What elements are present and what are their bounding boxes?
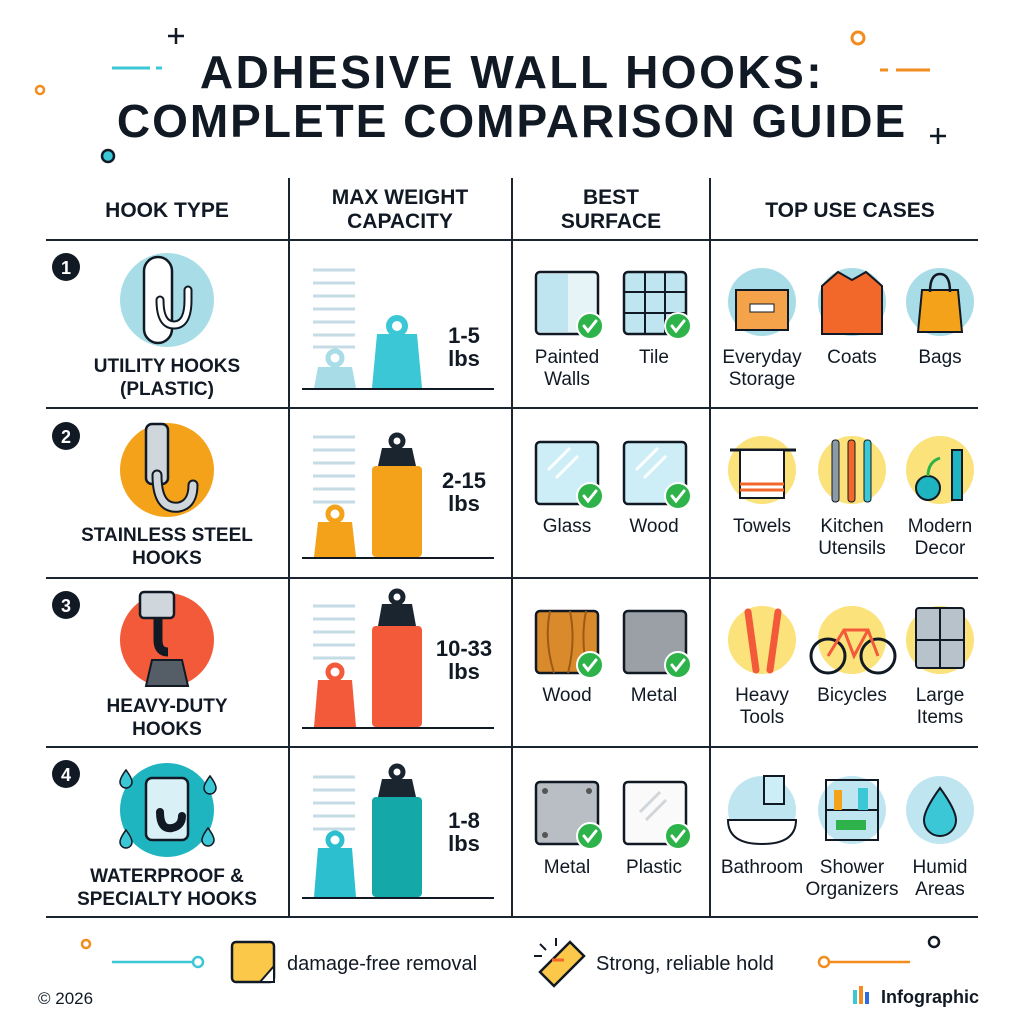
row 1: utility hooks (52, 253, 974, 400)
use cases: Kitchen (820, 516, 884, 537)
icon: plastic hook (120, 253, 214, 347)
decorative sparkles (36, 28, 946, 162)
surfaces: Wood (629, 516, 679, 537)
use cases: Areas (915, 879, 965, 900)
icon: steel hook (120, 423, 214, 517)
label: UTILITY HOOKS (94, 356, 240, 377)
row 2: stainless steel (52, 422, 974, 569)
label: STAINLESS STEEL (81, 525, 253, 546)
label: HOOKS (132, 719, 202, 740)
icon: strong hold (534, 938, 584, 986)
badge 1 (52, 253, 80, 281)
label: HOOKS (132, 548, 202, 569)
use cases: Tools (740, 707, 784, 728)
use cases: Organizers (806, 879, 898, 900)
weight chart (302, 766, 494, 898)
label (106, 696, 228, 740)
use cases: Large (916, 685, 964, 706)
use cases: Storage (729, 369, 795, 390)
weight chart (302, 435, 494, 558)
header row: MAX WEIGHT (332, 186, 468, 209)
copyright: © 2026 (38, 989, 93, 1008)
header row: CAPACITY (347, 210, 453, 233)
label: HEAVY-DUTY (106, 696, 228, 717)
logo: Infographic (881, 987, 979, 1007)
label (94, 356, 240, 400)
weight chart (302, 270, 494, 389)
surfaces (536, 611, 691, 706)
weight chart: lbs (448, 659, 480, 684)
table grid (46, 178, 978, 917)
weight chart: lbs (448, 346, 480, 371)
use cases (728, 606, 974, 728)
row 4: waterproof (52, 760, 974, 910)
badge 3 (52, 591, 80, 619)
header row (105, 186, 935, 233)
title: ADHESIVE WALL HOOKS: (200, 46, 824, 98)
label: (PLASTIC) (120, 379, 214, 400)
surfaces (536, 782, 691, 878)
use cases: Bags (918, 347, 962, 368)
weight chart: lbs (448, 491, 480, 516)
use cases: Shower (820, 857, 885, 878)
weight chart: 1-8 (448, 808, 480, 833)
surfaces: Walls (544, 369, 590, 390)
title (117, 46, 907, 147)
weight chart: 2-15 (442, 468, 486, 493)
use cases: Bicycles (817, 685, 887, 706)
surfaces: Glass (543, 516, 591, 537)
use cases: Bathroom (721, 857, 803, 878)
use cases (728, 436, 974, 559)
badge 2 (52, 422, 80, 450)
use cases: Heavy (735, 685, 789, 706)
surfaces: Plastic (626, 857, 682, 878)
weight chart (302, 591, 494, 728)
icon: heavy hook (120, 592, 214, 687)
badge 2: 2 (61, 427, 71, 447)
header row: BEST (583, 186, 639, 209)
weight chart: 10-33 (436, 636, 492, 661)
badge 3: 3 (61, 596, 71, 616)
surfaces: Metal (631, 685, 677, 706)
title: COMPLETE COMPARISON GUIDE (117, 95, 907, 147)
use cases: Coats (827, 347, 877, 368)
footer legend: damage-free removal (287, 953, 477, 975)
badge 4: 4 (61, 765, 71, 785)
use cases: Humid (913, 857, 967, 878)
use cases: Items (917, 707, 963, 728)
weight chart: lbs (448, 831, 480, 856)
badge 4 (52, 760, 80, 788)
header row: HOOK TYPE (105, 199, 229, 222)
use cases: Towels (733, 516, 791, 537)
label: WATERPROOF & (90, 866, 244, 887)
header row: TOP USE CASES (765, 199, 935, 222)
label (81, 525, 253, 569)
surfaces: Tile (639, 347, 669, 368)
icon: adhesive strip (232, 942, 274, 982)
row 3: heavy-duty (52, 591, 974, 740)
surfaces (536, 442, 691, 537)
label (77, 866, 257, 910)
label: SPECIALTY HOOKS (77, 889, 257, 910)
use cases: Utensils (818, 538, 886, 559)
use cases: Modern (908, 516, 972, 537)
use cases (721, 776, 974, 900)
use cases: Everyday (722, 347, 802, 368)
surfaces (535, 272, 691, 390)
footer legend (38, 937, 979, 1008)
use cases: Decor (915, 538, 966, 559)
surfaces: Wood (542, 685, 592, 706)
footer legend: Strong, reliable hold (596, 953, 774, 975)
use cases (722, 268, 974, 390)
surfaces: Metal (544, 857, 590, 878)
surfaces: Painted (535, 347, 599, 368)
weight chart: 1-5 (448, 323, 480, 348)
icon: waterproof hook (120, 763, 216, 857)
header row: SURFACE (561, 210, 661, 233)
badge 1: 1 (61, 258, 71, 278)
